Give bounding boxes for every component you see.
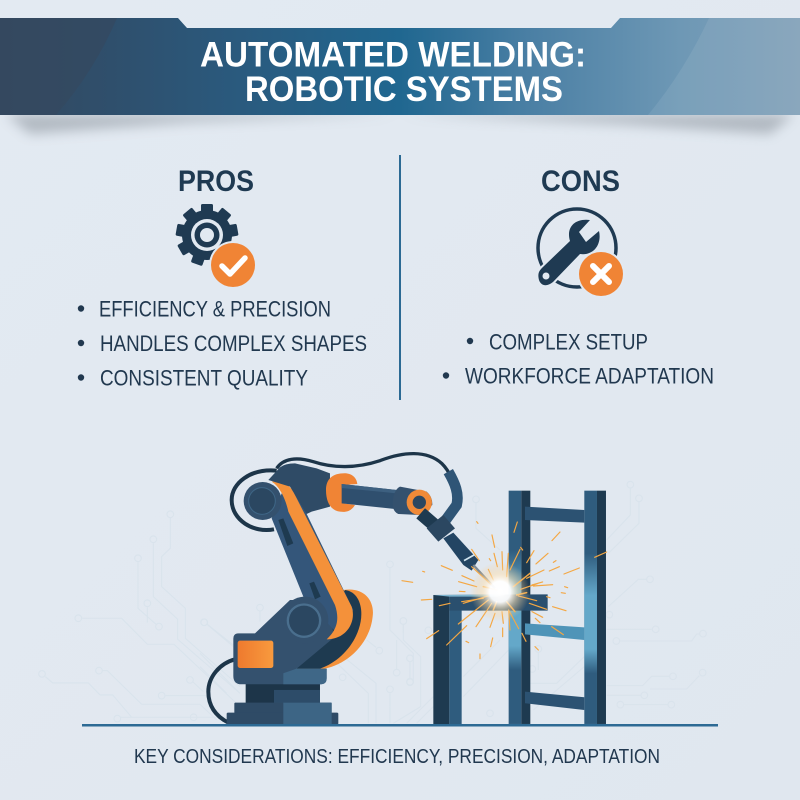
steel frame workpiece [433,491,606,724]
welding torch [421,472,495,588]
pros list [78,296,367,390]
pros list: HANDLES COMPLEX SHAPES [100,331,367,356]
title: ROBOTIC SYSTEMS [245,70,563,109]
orange panel [238,641,273,668]
footer caption: KEY CONSIDERATIONS: EFFICIENCY, PRECISION, ADAPTATION [134,745,660,768]
base plates [246,682,320,703]
banner shadow [6,114,794,134]
robot arm [208,454,451,725]
left leg [433,595,449,724]
arm link [272,493,353,637]
wrist [393,487,432,515]
centre column [509,491,521,724]
cons list: WORKFORCE ADAPTATION [465,364,714,388]
cable: top [277,454,451,477]
icon: wrench with cross [538,209,625,298]
divider [399,155,401,400]
right column [584,491,597,724]
torch arm [421,513,440,530]
cons heading: CONS [541,165,620,198]
ground line [82,724,718,726]
circuit trace background [39,481,706,723]
title banner [0,18,800,115]
cable: rear loop [232,470,277,530]
pros list: EFFICIENCY & PRECISION [99,296,331,322]
upper joint [244,482,282,520]
cable: base [208,659,235,723]
title [200,36,586,109]
wrist ring [407,490,432,515]
cons list [443,330,714,388]
cons list: COMPLEX SETUP [489,330,648,354]
lower joint [282,597,328,643]
rear orange crescent [297,589,373,669]
welding sparks [402,522,607,659]
pros list: CONSISTENT QUALITY [100,366,308,390]
torch hose [443,472,457,523]
arm slots [278,518,293,546]
forearm [342,484,397,509]
shoulder housing [268,463,330,514]
orange flange [326,473,357,512]
rungs [525,507,584,523]
orange strip [272,482,353,639]
icon: gear with check [175,204,257,289]
torch nut [427,515,455,542]
top plate [433,594,548,611]
title: AUTOMATED WELDING: [200,36,586,74]
nozzle [443,533,478,571]
pros heading: PROS [178,165,254,198]
pedestal body [233,600,335,684]
